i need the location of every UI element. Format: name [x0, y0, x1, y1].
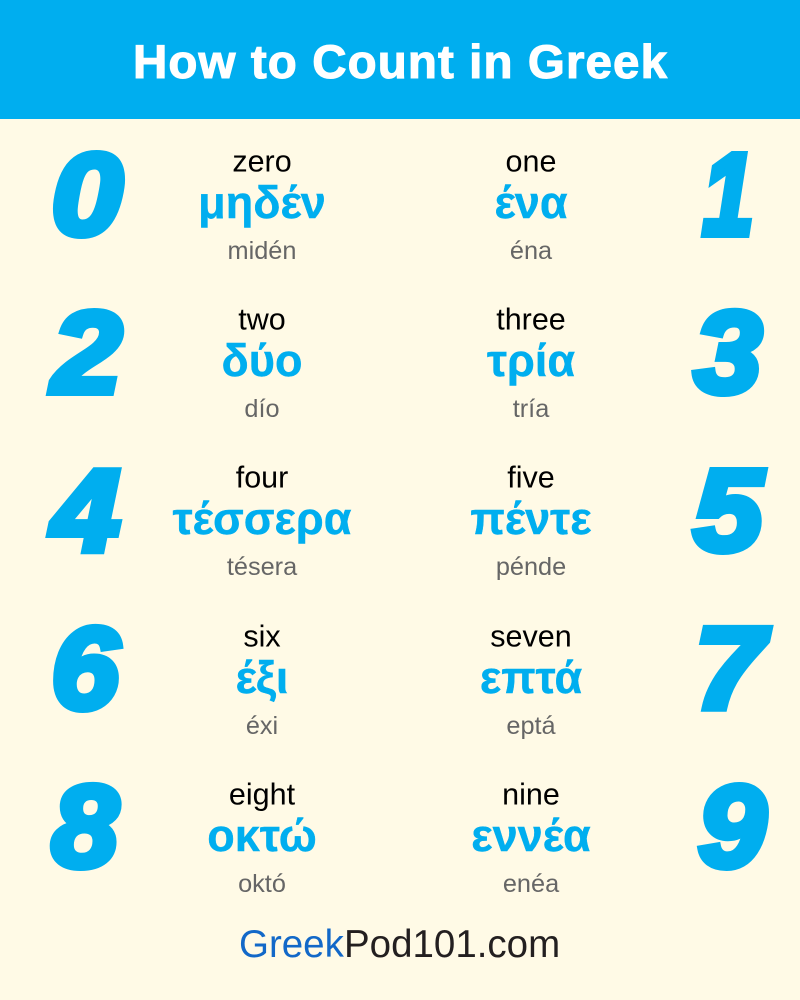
word: six — [236, 620, 288, 740]
number 0: 0 — [52, 130, 122, 259]
word: zero — [198, 144, 326, 265]
word: seven — [480, 620, 582, 740]
word: nine: εννέα — [471, 810, 591, 861]
number 8: 8 — [52, 761, 119, 891]
word: six: éxi — [246, 712, 278, 740]
word: eight: eight — [229, 778, 296, 812]
word: eight: οκτώ — [207, 810, 317, 861]
word: four: tésera — [227, 553, 298, 581]
word: five: πέντε — [470, 493, 592, 544]
word: one: éna — [510, 237, 553, 265]
word: nine — [471, 778, 591, 898]
word: seven: επτά — [480, 652, 582, 703]
word: five — [470, 460, 592, 581]
word: four: τέσσερα — [173, 493, 352, 544]
word: six: έξι — [236, 652, 288, 703]
number 9: 9 — [698, 762, 766, 892]
number 4: 4 — [50, 447, 120, 576]
word: three: tría — [513, 395, 550, 423]
number 6: 6 — [51, 604, 120, 734]
word: five: five — [507, 460, 555, 494]
word: four: four — [236, 460, 288, 494]
word: one — [494, 144, 568, 265]
word: eight: októ — [238, 870, 286, 898]
footer logo — [239, 923, 560, 966]
word: two: dío — [244, 395, 280, 423]
word: seven: eptá — [506, 712, 557, 740]
word: two: δύο — [222, 335, 302, 386]
word: seven: seven — [490, 620, 572, 654]
word: one: ένα — [494, 177, 568, 228]
number 1: 1 — [702, 131, 754, 260]
title banner: How to Count in Greek — [133, 36, 668, 89]
word: four — [173, 460, 352, 581]
number 5: 5 — [693, 446, 765, 576]
word: eight — [207, 778, 317, 898]
word: three — [487, 302, 575, 423]
word: nine: enéa — [503, 870, 560, 898]
word: five: pénde — [496, 553, 566, 581]
word: one: one — [506, 144, 556, 178]
word: zero: zero — [232, 144, 292, 178]
number 7: 7 — [695, 604, 769, 733]
number 3: 3 — [694, 288, 762, 418]
word: nine: nine — [502, 778, 560, 812]
footer logo: Greek — [239, 923, 345, 966]
word: three: τρία — [487, 335, 575, 386]
footer logo: Pod101.com — [344, 923, 560, 966]
word: zero: μηδέν — [198, 177, 326, 228]
title banner — [0, 0, 800, 119]
word: six: six — [243, 620, 281, 654]
word: three: three — [496, 302, 566, 336]
number 2: 2 — [50, 288, 122, 417]
word: two: two — [238, 302, 286, 336]
word: two — [222, 302, 302, 423]
word: zero: midén — [228, 237, 296, 265]
